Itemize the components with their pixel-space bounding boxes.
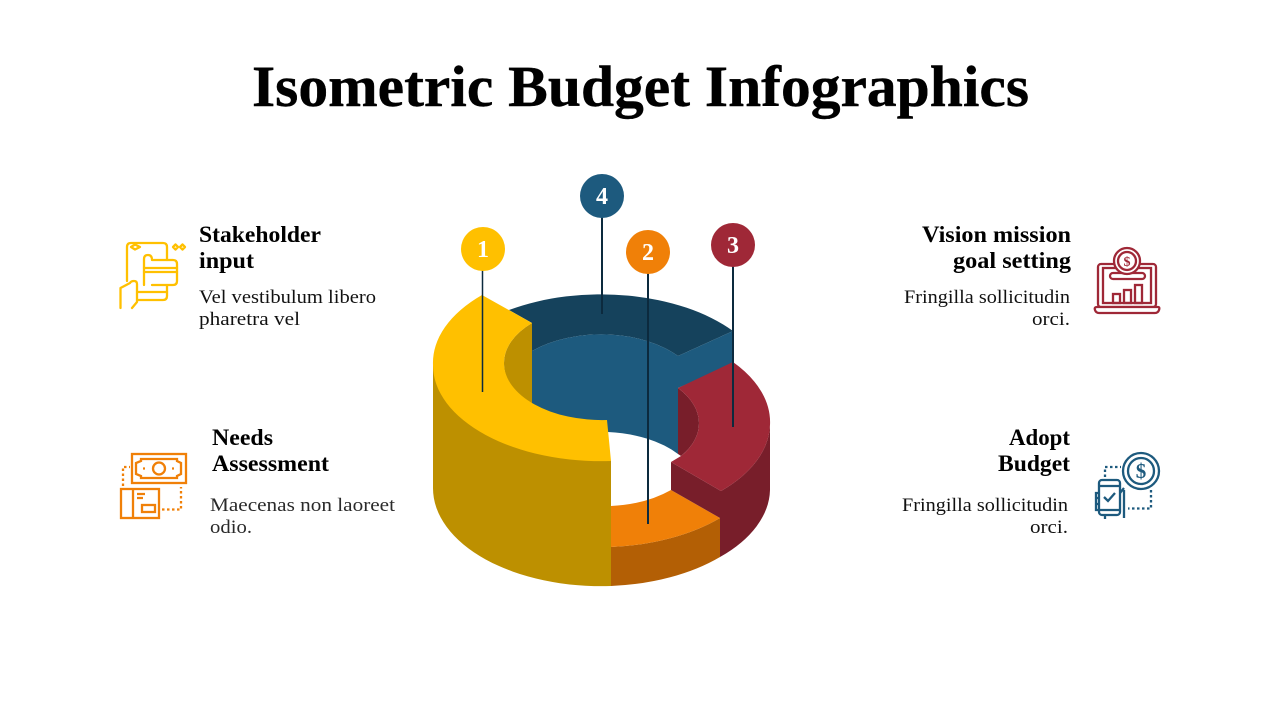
icon: phone and coin: $ <box>1136 459 1146 483</box>
heading: Adopt Budget <box>998 425 1070 476</box>
icon: phone and coin <box>1096 453 1159 519</box>
text: vision description <box>904 287 1071 330</box>
panel: stakeholder input <box>120 222 376 330</box>
chart: isometric ring <box>433 174 770 586</box>
text: needs description: Maecenas non laoreet <box>210 495 396 516</box>
panel: needs assessment <box>121 425 396 538</box>
marker 4 <box>580 174 624 218</box>
text: adopt description <box>902 495 1069 538</box>
marker 1: 1 <box>477 237 489 263</box>
heading: Needs Assessment <box>212 425 329 476</box>
segment 4: navy <box>509 294 733 454</box>
heading: Vision mission goal setting <box>922 222 1072 273</box>
marker 2 <box>626 230 670 274</box>
text: adopt description: orci. <box>1030 517 1068 538</box>
text: vision description: Fringilla sollicitudin <box>904 287 1071 308</box>
heading: Stakeholder input: input <box>199 248 254 273</box>
text: stakeholder description: pharetra vel <box>199 309 300 330</box>
segment 3: red <box>671 362 770 557</box>
text: vision description: orci. <box>1032 309 1070 330</box>
text: needs description <box>210 495 396 538</box>
segment 2: orange <box>611 490 720 586</box>
icon: banknote and box <box>121 454 186 518</box>
marker 3 <box>711 223 755 267</box>
heading: Vision mission goal setting: goal setting <box>953 248 1072 273</box>
icon: laptop with chart: $ <box>1124 255 1130 270</box>
heading: Adopt Budget: Budget <box>998 451 1070 476</box>
segment 1: yellow <box>433 295 611 586</box>
heading: Needs Assessment: Needs <box>212 425 273 450</box>
text: needs description: odio. <box>210 517 252 538</box>
panel: adopt budget <box>902 425 1159 538</box>
heading: Needs Assessment: Assessment <box>212 451 329 476</box>
icon: phone with card <box>120 243 185 308</box>
marker 2: 2 <box>642 240 654 266</box>
panel: vision mission goal setting <box>904 222 1159 330</box>
leader lines <box>482 216 733 524</box>
text: stakeholder description: Vel vestibulum libero <box>199 287 376 308</box>
marker 4: 4 <box>596 184 608 210</box>
heading: Stakeholder input <box>199 222 321 273</box>
text: adopt description: Fringilla sollicitudin <box>902 495 1069 516</box>
heading: Vision mission goal setting: Vision mission <box>922 222 1071 247</box>
text: stakeholder description <box>199 287 376 330</box>
marker 3: 3 <box>727 233 739 259</box>
marker 1 <box>461 227 505 271</box>
title: Isometric Budget Infographics <box>252 54 1029 119</box>
icon: laptop with chart <box>1095 248 1159 313</box>
heading: Stakeholder input: Stakeholder <box>199 222 321 247</box>
heading: Adopt Budget: Adopt <box>1009 425 1070 450</box>
